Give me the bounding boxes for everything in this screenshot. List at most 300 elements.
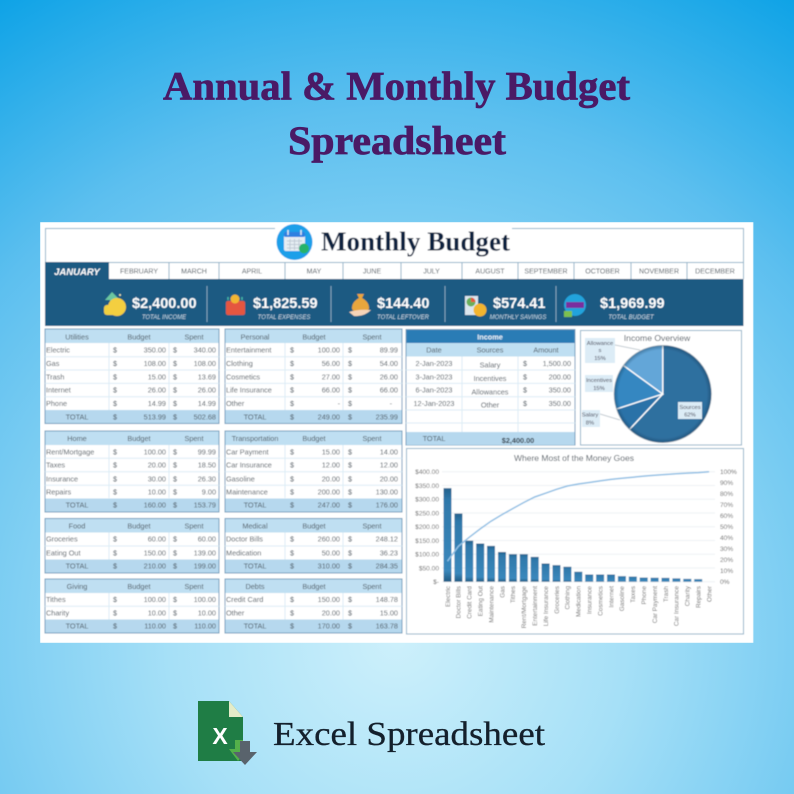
KPI: monthly savings: MONTHLY SAVINGS	[490, 315, 546, 321]
table: personal: 100.00	[318, 346, 340, 355]
table: income: 350.00	[549, 399, 571, 408]
pie label: incentives	[585, 375, 613, 392]
table: home: Home	[67, 434, 87, 443]
month tabs: APRIL	[242, 268, 262, 276]
left axis: $400.00	[415, 469, 439, 476]
table: debts: 148.78	[376, 595, 398, 604]
table: utilities: Internet	[46, 386, 71, 395]
table: food: $	[113, 535, 117, 544]
right axis: 80%	[720, 491, 733, 498]
pie label: allowances	[585, 338, 615, 363]
table: personal: Spent	[362, 332, 382, 341]
table: debts: $	[348, 595, 352, 604]
pie label: allowances: 15%	[594, 356, 606, 362]
table: utilities: $	[113, 359, 117, 368]
icon: calendar	[276, 224, 312, 260]
category labels: Insurance	[586, 586, 594, 614]
table: utilities: $	[113, 372, 117, 381]
table: debts: Debts	[245, 582, 265, 591]
KPI: total expenses	[226, 294, 318, 321]
left axis	[415, 469, 439, 586]
pie label: salary: 8%	[586, 420, 594, 426]
table: utilities: 26.00	[148, 386, 166, 395]
table: income: TOTAL	[423, 434, 445, 443]
table: personal: 249.00	[318, 412, 340, 421]
table: debts: $	[290, 595, 294, 604]
table: utilities: Electric	[46, 346, 70, 355]
table: utilities: 15.00	[148, 372, 166, 381]
table: transportation: Spent	[362, 434, 382, 443]
category labels: Gas	[499, 586, 506, 598]
title	[163, 64, 631, 163]
icon: budget	[564, 294, 586, 317]
table: utilities: 502.68	[194, 412, 216, 421]
table: personal: $	[348, 412, 352, 421]
icon: savings chart	[465, 296, 486, 316]
sheet heading: Monthly Budget	[321, 226, 510, 256]
table: income: $2,400.00	[502, 436, 534, 445]
table: income: $	[523, 372, 527, 381]
table: transportation: 176.00	[376, 501, 398, 510]
right axis: 90%	[720, 480, 733, 487]
table: food: $	[173, 535, 177, 544]
table: medical: 36.23	[380, 548, 398, 557]
pie label: incentives: 15%	[593, 386, 605, 392]
table: transportation: Car Payment	[226, 447, 269, 456]
table: utilities: 14.99	[198, 399, 216, 408]
table: utilities: TOTAL	[66, 412, 88, 421]
table: food: $	[113, 562, 117, 571]
table: utilities: $	[173, 386, 177, 395]
table: utilities: Utilities	[65, 332, 89, 341]
table: utilities: Trash	[46, 372, 64, 381]
table: utilities: $	[173, 372, 177, 381]
month tabs: NOVEMBER	[639, 268, 679, 276]
right axis: 100%	[720, 469, 737, 476]
table: giving: 110.00	[144, 622, 166, 631]
left axis: $150.00	[415, 538, 439, 545]
table: personal: 27.00	[322, 372, 340, 381]
right axis: 10%	[720, 568, 733, 575]
category labels: Charity	[685, 585, 692, 606]
table: utilities: $	[113, 412, 117, 421]
table: home: Budget	[127, 434, 151, 443]
table: giving: Budget	[127, 582, 151, 591]
category labels: Medication	[576, 586, 583, 617]
table: food: 60.00	[148, 535, 166, 544]
table: debts: $	[348, 609, 352, 618]
month tabs: JULY	[423, 268, 440, 276]
right axis: 30%	[720, 546, 733, 553]
table: giving	[45, 579, 219, 633]
table: transportation: $	[348, 447, 352, 456]
table: medical: 260.00	[318, 535, 340, 544]
table: giving: Tithes	[46, 595, 66, 604]
category labels	[445, 585, 713, 628]
table: utilities: 108.00	[194, 359, 216, 368]
table: income	[406, 330, 575, 445]
table: income: Sources	[477, 346, 504, 355]
icon: coins	[104, 292, 126, 316]
table: utilities: $	[173, 346, 177, 355]
table: home: 18.50	[198, 461, 216, 470]
table: personal: Life Insurance	[226, 386, 272, 395]
table: personal: Other	[226, 399, 245, 408]
pie label: salary	[582, 410, 600, 427]
table: home: $	[113, 501, 117, 510]
pie label: allowances: s	[599, 348, 602, 354]
table: home: 10.00	[148, 488, 166, 497]
table: home: $	[173, 488, 177, 497]
left axis: $100.00	[415, 552, 439, 558]
KPI: monthly savings: $574.41	[493, 296, 545, 312]
category labels: Repairs	[696, 586, 702, 608]
category labels: Credit Card	[466, 586, 474, 619]
table: utilities: 14.99	[148, 399, 166, 408]
table: giving: 110.00	[194, 622, 216, 631]
table: transportation: Maintenance	[226, 488, 268, 497]
category labels: Internet	[608, 586, 615, 608]
KPI: total expenses: TOTAL EXPENSES	[258, 315, 310, 321]
icon: money bag	[349, 294, 371, 316]
table: giving: 10.00	[198, 609, 216, 618]
table: debts	[225, 579, 402, 633]
table: personal: $	[290, 399, 294, 408]
table: personal: $	[290, 346, 294, 355]
category labels: Car Insurance	[674, 586, 681, 626]
left axis: $300.00	[415, 496, 439, 504]
cumulative line	[448, 472, 709, 561]
table: food: $	[113, 548, 117, 557]
icon: excel file with download arrow: X	[212, 723, 228, 749]
table: utilities: 350.00	[144, 346, 166, 355]
table: transportation: $	[348, 488, 352, 497]
table: income: $	[523, 359, 527, 368]
right axis: 40%	[720, 535, 733, 542]
KPI: total leftover	[349, 294, 430, 321]
month tabs: JUNE	[363, 268, 381, 276]
table: transportation: $	[290, 501, 294, 510]
table: food: Eating Out	[46, 548, 80, 557]
table: transportation: 200.00	[318, 488, 340, 497]
table: medical: Doctor Bills	[226, 535, 263, 544]
table: transportation: $	[290, 461, 294, 470]
table: food: Spent	[184, 521, 204, 530]
table: transportation: $	[348, 474, 352, 483]
table: income: 350.00	[549, 386, 571, 395]
table: income: Income	[477, 332, 503, 341]
pie label: sources: 62%	[684, 412, 696, 418]
pie label: salary: Salary	[582, 412, 598, 418]
table: giving: $	[113, 595, 117, 604]
left axis: $200.00	[415, 524, 439, 531]
KPI: total budget: $1,969.99	[600, 296, 665, 312]
category labels: Life Insurance	[543, 586, 550, 626]
table: utilities: 108.00	[144, 359, 166, 368]
table: home: 100.00	[144, 447, 166, 456]
category labels: Phone	[641, 586, 648, 604]
KPI: total income	[104, 292, 197, 321]
table: transportation: $	[290, 488, 294, 497]
table: debts: 163.78	[376, 622, 398, 631]
table: giving: $	[173, 609, 177, 618]
table: personal: -	[390, 399, 393, 408]
table: income: $	[523, 386, 527, 395]
table: transportation: TOTAL	[244, 501, 266, 510]
table: personal: $	[290, 412, 294, 421]
table: personal: -	[338, 399, 341, 408]
table: income: Amount	[533, 346, 559, 355]
KPI: total income: TOTAL INCOME	[142, 315, 187, 321]
table: transportation: 130.00	[376, 488, 398, 497]
table: home: 26.30	[198, 474, 216, 483]
table: home: 9.00	[202, 488, 216, 497]
icon: wallet	[226, 294, 245, 315]
left axis: $-	[433, 579, 439, 586]
table: personal: 235.99	[376, 412, 398, 421]
category labels: Clothing	[565, 586, 572, 609]
table: medical: 284.35	[376, 562, 398, 571]
panel: budget dashboard sheet	[40, 222, 754, 643]
table: home: $	[113, 461, 117, 470]
title: Annual & Monthly Budget	[163, 64, 631, 108]
panel: pareto chart	[406, 448, 744, 634]
table: home: $	[173, 474, 177, 483]
table: home: Spent	[184, 434, 204, 443]
table: income: 200.00	[549, 372, 571, 381]
table: food: Budget	[127, 521, 151, 530]
table: personal: TOTAL	[244, 412, 266, 421]
title: Spreadsheet	[288, 118, 507, 163]
table: personal: Clothing	[226, 359, 253, 368]
table: personal: Cosmetics	[226, 372, 260, 381]
right axis: 60%	[720, 513, 733, 520]
category labels: Cosmetics	[597, 586, 604, 616]
chart heading: Where Most of the Money Goes	[514, 453, 634, 463]
table: utilities: Phone	[46, 399, 67, 408]
table: home: $	[113, 447, 117, 456]
table: home: Rent/Mortgage	[46, 447, 94, 456]
category labels: Doctor Bills	[456, 586, 463, 618]
icon: excel file with download arrow	[198, 701, 257, 765]
table: transportation: 247.00	[318, 501, 340, 510]
table: food: 210.00	[144, 562, 166, 571]
table: income: 3-Jan-2023	[416, 372, 452, 381]
table: debts: 20.00	[322, 609, 340, 618]
table: home: 99.99	[198, 447, 216, 456]
table: transportation: 20.00	[380, 474, 398, 483]
KPI: total budget: TOTAL BUDGET	[608, 315, 655, 321]
table: food	[45, 518, 219, 573]
table: personal: 66.00	[380, 386, 398, 395]
category labels: Trash	[663, 586, 670, 602]
table: medical: Medical	[242, 521, 268, 530]
table: utilities: $	[173, 359, 177, 368]
table: medical: $	[290, 562, 294, 571]
table: income: 12-Jan-2023	[414, 399, 454, 408]
table: food: Groceries	[46, 535, 78, 544]
table: income: Salary	[480, 360, 501, 370]
month tabs: DECEMBER	[695, 268, 735, 276]
table: giving: 10.00	[148, 609, 166, 618]
table: utilities: $	[113, 386, 117, 395]
table: transportation: Budget	[302, 434, 326, 443]
table: personal: $	[348, 372, 352, 381]
table: debts: $	[290, 609, 294, 618]
table: income: 2-Jan-2023	[416, 359, 452, 368]
table: income: 6-Jan-2023	[416, 386, 452, 395]
category labels: Maintenance	[488, 586, 495, 623]
table: transportation: 12.00	[322, 461, 340, 470]
table: giving: $	[173, 595, 177, 604]
month tabs: OCTOBER	[585, 268, 620, 276]
table: debts: Other	[226, 609, 245, 618]
right axis	[720, 469, 737, 586]
table: medical: 248.12	[376, 535, 398, 544]
category labels: Entertainment	[532, 586, 539, 626]
table: giving: Giving	[67, 582, 87, 591]
KPI: total income: $2,400.00	[132, 296, 197, 312]
table: personal: Budget	[302, 332, 326, 341]
table: giving: Spent	[184, 582, 204, 591]
bars	[444, 488, 702, 582]
pie slices	[614, 345, 712, 443]
table: food: TOTAL	[66, 562, 88, 571]
table: medical: 50.00	[322, 548, 340, 557]
sheet title bar	[46, 224, 744, 262]
table: home: $	[113, 488, 117, 497]
table: personal	[225, 329, 402, 424]
table: food: 60.00	[198, 535, 216, 544]
table: food: 199.00	[194, 562, 216, 571]
month tabs: AUGUST	[475, 268, 505, 276]
table: home: Insurance	[46, 474, 78, 483]
month tabs: MARCH	[181, 268, 207, 276]
table: food: Food	[69, 521, 85, 530]
table: personal: $	[290, 372, 294, 381]
table: personal: 56.00	[322, 359, 340, 368]
table: food: $	[173, 548, 177, 557]
table: utilities: 513.99	[144, 412, 166, 421]
table: transportation: $	[290, 474, 294, 483]
table: home: 153.79	[194, 501, 216, 510]
table: giving: 100.00	[144, 595, 166, 604]
table: personal: $	[348, 386, 352, 395]
table: debts: $	[348, 622, 352, 631]
table: giving: Charity	[46, 609, 69, 618]
table: medical: Budget	[302, 521, 326, 530]
KPI: total budget	[564, 294, 665, 321]
table: personal: Entertainment	[226, 346, 271, 355]
table: medical: Medication	[226, 548, 261, 557]
right axis: 50%	[720, 524, 733, 531]
table: transportation: Gasoline	[226, 474, 255, 483]
table: transportation: 20.00	[322, 474, 340, 483]
table: debts: $	[290, 622, 294, 631]
table: personal: $	[348, 346, 352, 355]
category labels: Taxes	[630, 586, 637, 603]
table: transportation: $	[290, 447, 294, 456]
table: personal: 26.00	[380, 372, 398, 381]
month tabs	[45, 262, 744, 279]
footer label: Excel Spreadsheet	[273, 716, 546, 753]
table: debts: 15.00	[380, 609, 398, 618]
table: debts: Budget	[302, 582, 326, 591]
table: medical: $	[290, 535, 294, 544]
table: personal: 89.99	[380, 346, 398, 355]
category labels: Eating Out	[478, 586, 484, 616]
table: food: 150.00	[144, 548, 166, 557]
category labels: Rent/Mortgage	[521, 586, 528, 628]
table: personal: Personal	[241, 332, 270, 341]
KPI: monthly savings	[465, 296, 546, 321]
table: debts: 170.00	[318, 622, 340, 631]
table: personal: $	[348, 359, 352, 368]
table: giving: $	[113, 609, 117, 618]
table: income: Other	[481, 400, 500, 410]
pie leader lines	[600, 345, 640, 420]
table: utilities: Gas	[46, 359, 60, 368]
table: transportation: $	[348, 501, 352, 510]
table: utilities: $	[113, 346, 117, 355]
left axis: $350.00	[415, 483, 439, 490]
table: home: Repairs	[46, 488, 71, 497]
month tabs: SEPTEMBER	[524, 268, 568, 276]
KPI: total leftover: TOTAL LEFTOVER	[377, 315, 430, 321]
left axis: $50.00	[419, 565, 439, 572]
pie label: sources	[678, 402, 702, 419]
table: giving: $	[113, 622, 117, 631]
table: utilities: Spent	[184, 332, 204, 341]
table: medical: $	[348, 548, 352, 557]
table: income: Incentives	[474, 374, 507, 383]
category labels: Car Payment	[652, 586, 659, 623]
table: utilities: 13.69	[198, 372, 216, 381]
table: personal: $	[290, 386, 294, 395]
table: transportation: 14.00	[380, 447, 398, 456]
pie label: allowances: Allowance	[587, 341, 613, 347]
table: home: 30.00	[148, 474, 166, 483]
table: utilities: $	[173, 399, 177, 408]
table: income: $	[523, 399, 527, 408]
month tabs: MAY	[307, 268, 322, 276]
table: utilities: Budget	[127, 332, 151, 341]
month tabs: JANUARY	[54, 267, 102, 278]
pie heading: Income Overview	[624, 333, 691, 343]
table: debts: Credit Card	[226, 595, 263, 604]
table: medical: $	[348, 535, 352, 544]
pie label: incentives: Incentives	[586, 378, 612, 384]
table: debts: Spent	[362, 582, 382, 591]
table: debts: TOTAL	[244, 622, 266, 631]
table: medical: 310.00	[318, 562, 340, 571]
right axis: 0%	[720, 579, 730, 586]
table: home: $	[173, 461, 177, 470]
table: personal: $	[348, 399, 352, 408]
category labels: Tithes	[510, 586, 517, 603]
category labels: Electric	[445, 585, 452, 607]
KPI: total leftover: $144.40	[377, 296, 429, 312]
left axis: $250.00	[415, 510, 439, 517]
table: personal: 54.00	[380, 359, 398, 368]
table: utilities: $	[113, 399, 117, 408]
table: personal: 66.00	[322, 386, 340, 395]
table: transportation: 15.00	[322, 447, 340, 456]
table: utilities	[45, 329, 219, 424]
table: home: 20.00	[148, 461, 166, 470]
table: utilities: 340.00	[194, 346, 216, 355]
table: medical: Spent	[362, 521, 382, 530]
